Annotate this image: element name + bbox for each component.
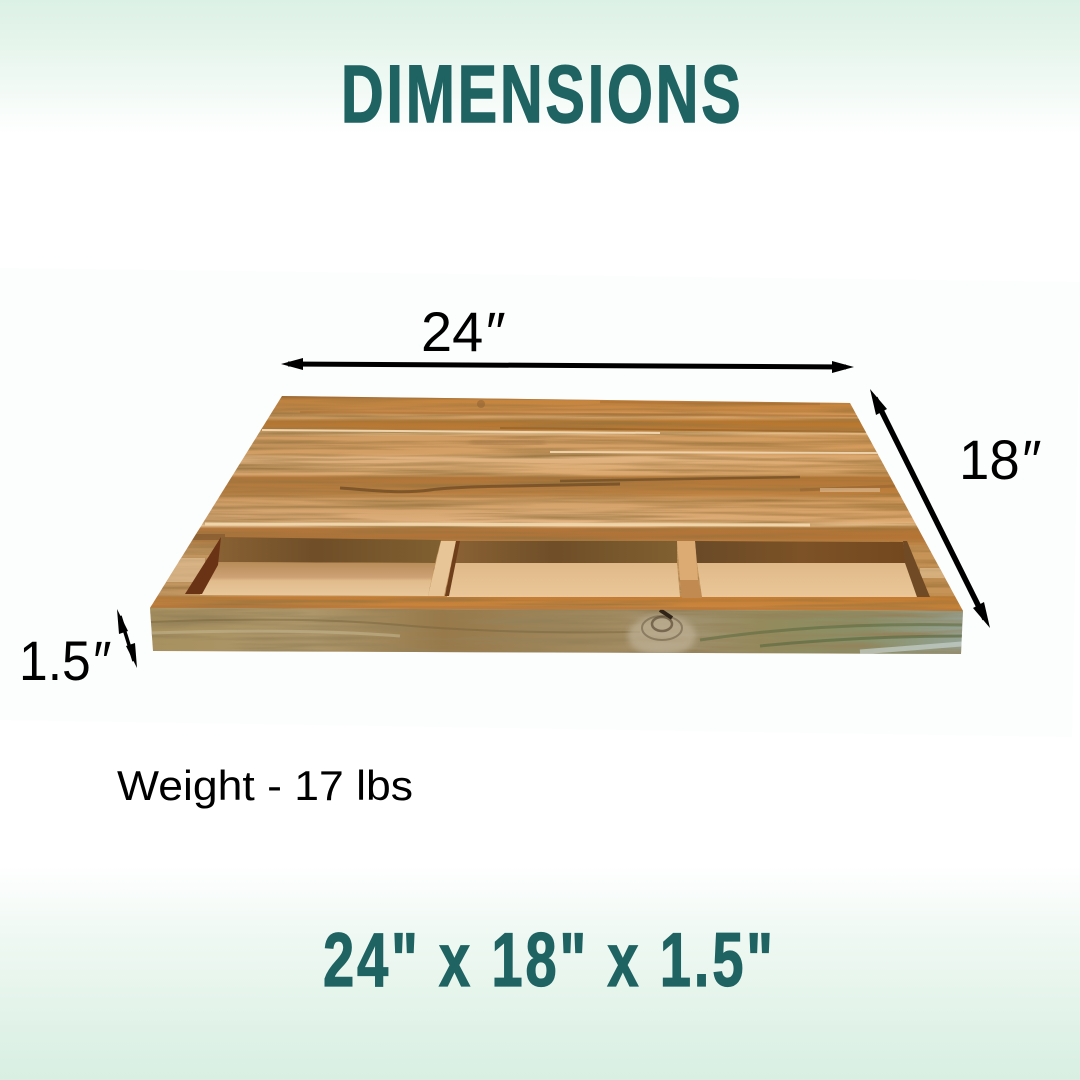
background: top green fade [0, 0, 1080, 135]
background: product photo panel [0, 268, 1080, 737]
arrow: 24 inch width [281, 358, 854, 373]
label: 24 inch: 24″ [421, 300, 505, 363]
dimensions summary: 24" x 18" x 1.5" [323, 918, 773, 1003]
cutting board [150, 396, 963, 656]
compartment 3 [695, 541, 906, 563]
right wedge [903, 541, 930, 597]
compartment 2 [453, 541, 677, 563]
label: 1.5 inch: 1.5″ [19, 629, 111, 692]
board front edge [150, 608, 963, 656]
label: 18 inch: 18″ [959, 428, 1041, 491]
weight text: Weight - 17 lbs [117, 762, 413, 809]
tray recess [185, 537, 930, 598]
arrow: 1.5 inch thickness [117, 609, 137, 668]
background: bottom green fade [0, 865, 1080, 1080]
board top surface [150, 396, 963, 611]
compartment 1 [212, 537, 441, 563]
divider 2 [677, 541, 698, 580]
arrow: 18 inch depth [870, 389, 990, 628]
left wedge [185, 537, 221, 594]
title: DIMENSIONS [341, 49, 741, 140]
divider 1 [428, 541, 456, 596]
